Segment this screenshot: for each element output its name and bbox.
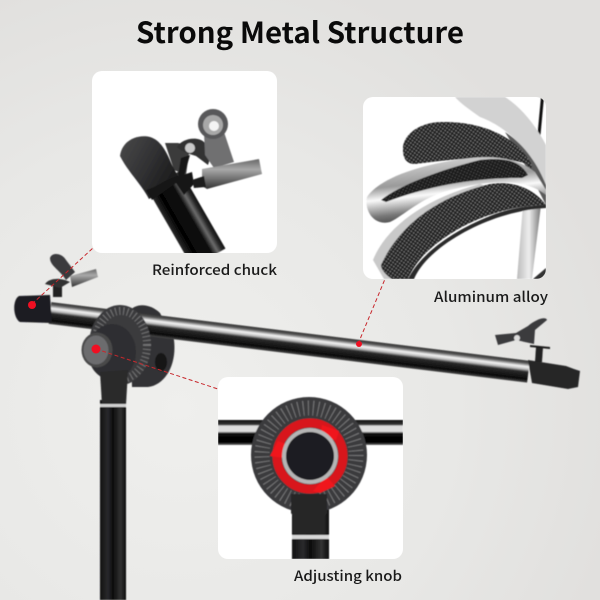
rear housing [130, 305, 174, 387]
upper mesh panel [403, 122, 532, 169]
lower mesh panel [381, 183, 546, 279]
lower tube [292, 505, 329, 559]
horizontal boom bar [49, 302, 530, 383]
top chrome band [455, 97, 546, 190]
clip ring [198, 109, 228, 139]
chuck cap [120, 136, 179, 199]
callout: red dots [28, 301, 362, 354]
knob cap [282, 428, 338, 484]
chuck tube [152, 171, 226, 253]
housing hole [155, 353, 167, 371]
front knob [82, 332, 112, 368]
dark corner [533, 268, 546, 279]
vertical pole [100, 400, 126, 600]
panel: adjusting knob [218, 377, 403, 559]
lower frame [373, 184, 490, 279]
clip mount [165, 143, 190, 175]
clip jaw [202, 159, 262, 189]
panel: aluminum alloy [363, 97, 546, 279]
neck [291, 494, 327, 534]
chuck collar [146, 172, 194, 200]
pole ring [100, 404, 126, 407]
knurled disc [251, 397, 367, 513]
label: adjusting knob: Adjusting knob [294, 566, 402, 586]
middle mesh strip [381, 159, 528, 202]
right end cap [528, 360, 580, 389]
panel: reinforced chuck [92, 71, 277, 267]
clip lever [204, 132, 234, 168]
upright post [517, 205, 541, 279]
middle chrome strap [367, 157, 546, 223]
label: aluminum alloy: Aluminum alloy [434, 287, 548, 307]
right clip [495, 318, 550, 362]
small clip arm [177, 139, 212, 165]
left clip [45, 254, 98, 297]
neck ring [292, 535, 329, 539]
label: reinforced chuck: Reinforced chuck [152, 260, 277, 280]
left end cap [14, 295, 52, 323]
red rotation ring [277, 423, 343, 489]
crossbar [218, 420, 403, 445]
rotation arrows [270, 425, 339, 493]
knurled disc [89, 305, 151, 385]
title: Strong Metal Structure [136, 10, 464, 52]
boom arm assembly [14, 254, 580, 600]
callout: dashed leader lines [32, 248, 385, 389]
neck [100, 370, 128, 405]
